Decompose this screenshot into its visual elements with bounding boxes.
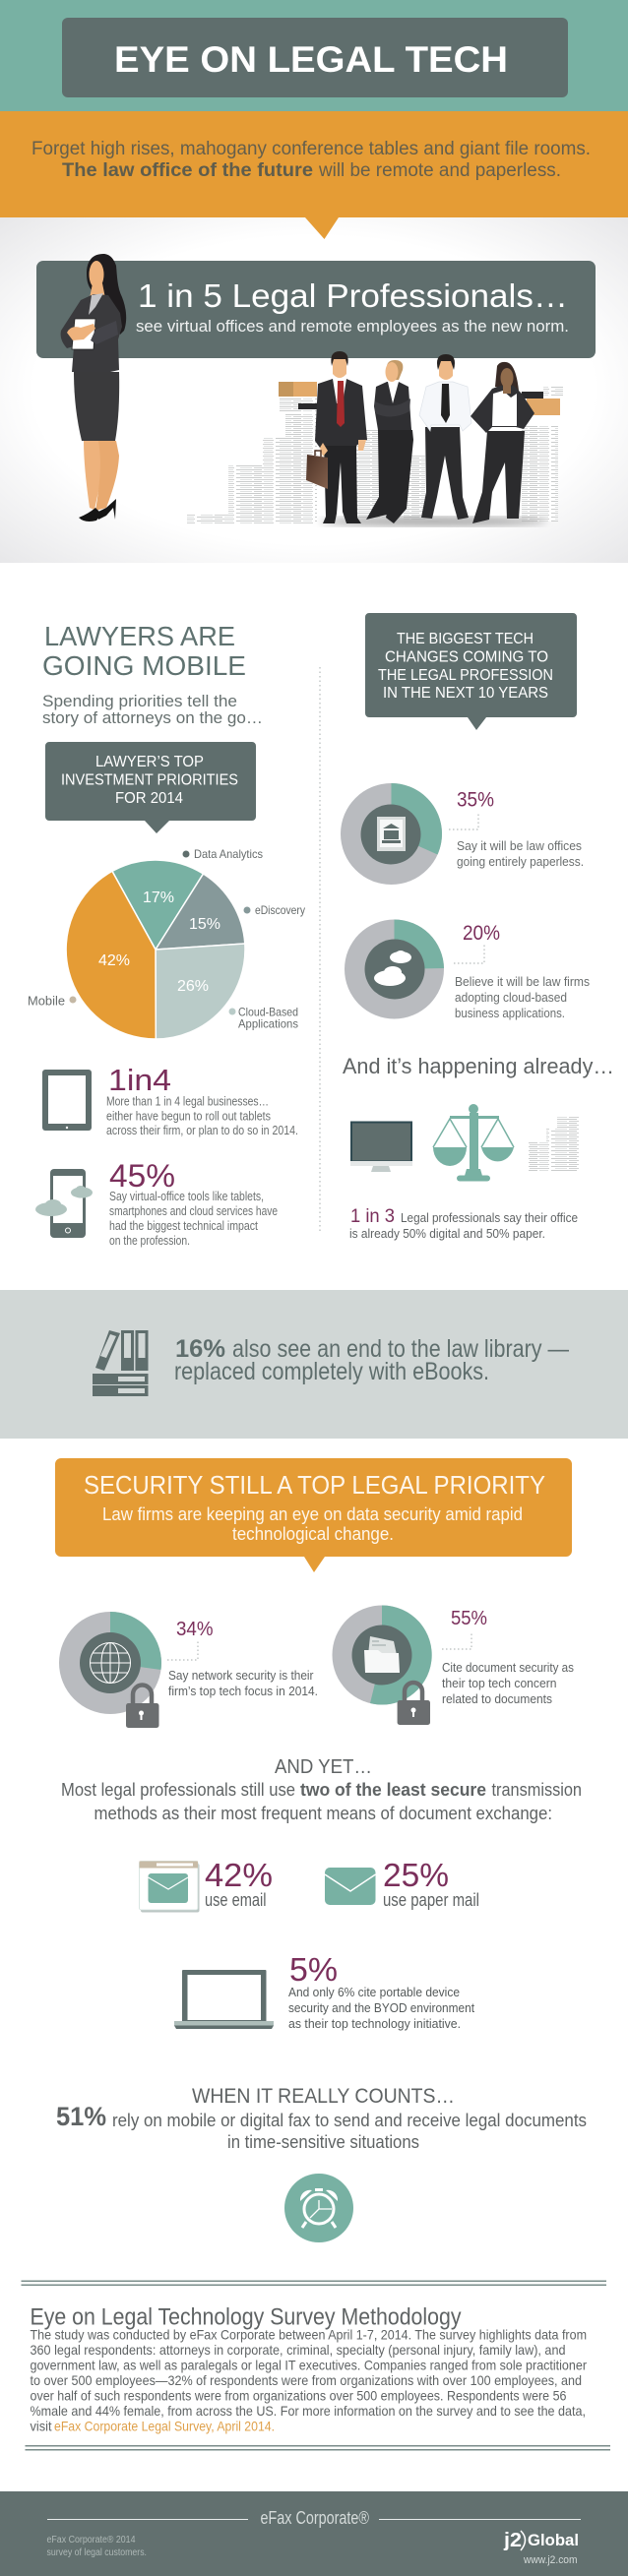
callout: security heading: Law firms are keeping an eye on data security amid rapid	[102, 1504, 523, 1524]
stat: 34 percent: Say network security is their	[168, 1668, 314, 1683]
donut chart: 35 percent paperless	[341, 783, 442, 885]
methodology text	[30, 2304, 587, 2434]
stat: 5 percent: 5%	[289, 1951, 338, 1988]
pie legend: Applications	[238, 1017, 298, 1031]
pie chart: investment priorities: 17%	[143, 889, 174, 906]
callout: biggest tech changes: THE BIGGEST TECH	[397, 631, 534, 647]
hero callout: 1 in 5 Legal Professionals…	[138, 277, 568, 314]
footer: www.j2.com	[523, 2554, 577, 2566]
icon: paper stack	[529, 1117, 579, 1171]
stat: 42 percent email	[205, 1857, 273, 1910]
icon: folder with documents	[364, 1636, 400, 1673]
illustration: standing businesswoman	[61, 254, 126, 521]
stat: 42 percent email: use email	[205, 1890, 266, 1910]
title: EYE ON LEGAL TECH	[114, 39, 508, 80]
icon: globe	[91, 1643, 130, 1683]
stat: 42 percent email: 42%	[205, 1857, 273, 1893]
text block: and yet: Most legal professionals still use	[61, 1780, 295, 1800]
pie chart: investment priorities	[66, 860, 245, 1039]
icon: alarm clock	[284, 2174, 353, 2242]
heading: and it's happening already: And it’s happening already…	[343, 1054, 614, 1078]
woman with hands on hips	[471, 362, 534, 523]
text block: when it really counts	[56, 2084, 587, 2152]
donut chart: 55 percent document security	[333, 1605, 432, 1725]
icon: padlock	[126, 1686, 159, 1728]
illustration: paper stacks and boxes	[187, 382, 563, 524]
stat: 5 percent: And only 6% cite portable device	[288, 1985, 460, 1999]
text block: and yet: AND YET…	[275, 1756, 372, 1778]
pie chart: investment priorities: 42%	[98, 952, 130, 969]
stat: 20 percent: adopting cloud-based	[455, 990, 567, 1005]
stat: 45 percent: on the profession.	[109, 1234, 190, 1248]
stat: 55 percent	[442, 1608, 574, 1706]
text block: and yet: transmission	[492, 1780, 582, 1800]
text block: when it really counts: 51%	[56, 2102, 106, 2131]
panel: law library band	[0, 1290, 628, 1439]
stat: 20 percent: business applications.	[455, 1006, 565, 1020]
stat: 25 percent paper mail: 25%	[383, 1857, 449, 1893]
intro banner: Forget high rises, mahogany conference tables and giant file rooms.	[31, 139, 591, 159]
text block: when it really counts: WHEN IT REALLY COUNTS…	[192, 2084, 455, 2108]
pie legend: Cloud-Based	[238, 1006, 298, 1019]
section: lawyers are going mobile heading: LAWYERS ARE	[44, 621, 235, 651]
methodology text: Eye on Legal Technology Survey Methodology	[30, 2304, 461, 2330]
text block: when it really counts: rely on mobile or digital fax to send and receive legal documents	[112, 2111, 587, 2130]
hero callout	[36, 261, 596, 358]
text block: when it really counts: in time-sensitive situations	[227, 2132, 419, 2152]
text block: and yet: two of the least secure	[300, 1780, 486, 1800]
icon: tablet with law building	[377, 817, 406, 851]
section: lawyers are going mobile heading	[42, 621, 246, 681]
footer: eFax Corporate®	[260, 2508, 369, 2528]
callout: security heading	[55, 1458, 572, 1572]
text block: and yet: methods as their most frequent means of document exchange:	[94, 1804, 552, 1823]
stat: 55 percent: 55%	[451, 1608, 487, 1629]
pie legend	[28, 847, 305, 1031]
section: lawyers are going mobile heading: GOING MOBILE	[42, 650, 246, 681]
donut chart: 34 percent network security	[59, 1612, 161, 1728]
panel: law library band: replaced completely with eBooks.	[174, 1358, 489, 1385]
callout: biggest tech changes: CHANGES COMING TO	[385, 649, 548, 665]
pie legend: eDiscovery	[255, 903, 305, 917]
pie chart: investment priorities: 26%	[177, 978, 209, 995]
stat: 55 percent: their top tech concern	[442, 1676, 557, 1690]
header band	[0, 0, 628, 112]
man in white shirt	[419, 354, 471, 520]
icon: scales of justice	[433, 1104, 514, 1181]
icon: books	[93, 1330, 148, 1396]
subheading: story of attorneys on the go…	[42, 708, 263, 727]
callout: top investment priorities: FOR 2014	[115, 790, 183, 807]
pie chart: investment priorities: 15%	[189, 916, 220, 933]
callout: biggest tech changes	[365, 613, 577, 730]
stat: 35 percent	[449, 789, 584, 869]
pie legend: Data Analytics	[194, 847, 263, 861]
title	[62, 18, 568, 97]
methodology text: to over 500 employees—32% of respondents were from organizations with over 100 employees, and	[30, 2372, 582, 2388]
callout: biggest tech changes: IN THE NEXT 10 YEARS	[383, 685, 548, 702]
stat: 55 percent: Cite document security as	[442, 1660, 574, 1675]
intro banner	[0, 111, 628, 217]
stat: 5 percent	[288, 1951, 474, 2031]
stat: 34 percent: firm’s top tech focus in 2014.	[168, 1684, 318, 1698]
callout: top investment priorities	[45, 742, 256, 833]
stat: 25 percent paper mail: use paper mail	[383, 1890, 479, 1910]
icon: tablet	[42, 1070, 92, 1131]
stat: 35 percent: 35%	[457, 789, 494, 811]
stat: 1 in 4: 1in4	[108, 1063, 171, 1097]
footer: survey of legal customers.	[47, 2547, 147, 2558]
hero callout: see virtual offices and remote employees as the new norm.	[136, 317, 569, 336]
stat: 1 in 3: is already 50% digital and 50% paper.	[349, 1226, 545, 1241]
donut chart: 20 percent cloud	[345, 919, 444, 1019]
stat: 1 in 4: either have begun to roll out tablets	[106, 1110, 271, 1124]
illustration: group of four legal professionals	[306, 351, 546, 526]
stat: 20 percent	[454, 922, 590, 1020]
callout: security heading: SECURITY STILL A TOP LEGAL PRIORITY	[84, 1470, 545, 1500]
stat: 1 in 4	[106, 1063, 298, 1137]
footer: eFax Corporate® 2014	[47, 2535, 136, 2545]
callout: security heading: technological change.	[232, 1524, 394, 1544]
stat: 25 percent paper mail	[383, 1857, 479, 1910]
icon: laptop	[174, 1970, 274, 2029]
stat: 35 percent: going entirely paperless.	[457, 854, 584, 869]
woman with crossed arms	[366, 360, 413, 523]
stat: 34 percent	[167, 1619, 318, 1698]
stat: 1 in 4: More than 1 in 4 legal businesses…	[106, 1094, 269, 1108]
panel: law library band: also see an end to the law library —	[232, 1335, 569, 1363]
stat: 34 percent: 34%	[176, 1619, 214, 1640]
icon: envelope	[325, 1868, 376, 1905]
logo: j2 Global: Global	[528, 2531, 579, 2549]
intro banner: The law office of the future	[62, 160, 313, 181]
methodology text: eFax Corporate Legal Survey, April 2014.	[54, 2419, 275, 2434]
methodology text: visit	[30, 2419, 52, 2434]
stat: 5 percent: security and the BYOD environment	[288, 2000, 474, 2015]
callout: biggest tech changes: THE LEGAL PROFESSION	[378, 667, 553, 684]
callout: top investment priorities: INVESTMENT PRIORITIES	[61, 771, 238, 789]
icon: desktop monitor	[350, 1122, 412, 1172]
callout: top investment priorities: LAWYER’S TOP	[95, 754, 204, 770]
subheading: Spending priorities tell the	[42, 692, 237, 710]
stat: 45 percent: Say virtual-office tools like tablets,	[109, 1190, 264, 1203]
subheading	[42, 692, 263, 727]
stat: 1 in 3: 1 in 3	[350, 1206, 395, 1227]
stat: 20 percent: Believe it will be law firms	[455, 974, 590, 989]
logo: j2 Global: j2	[503, 2530, 522, 2551]
icon: smartphone with clouds	[35, 1169, 93, 1238]
text block: and yet	[61, 1756, 582, 1823]
stat: 45 percent: 45%	[109, 1158, 175, 1194]
icon: padlock	[398, 1683, 430, 1725]
stat: 1 in 3	[349, 1206, 578, 1241]
stat: 55 percent: related to documents	[442, 1691, 552, 1706]
stat: 1 in 4: across their firm, or plan to do so in 2014.	[106, 1124, 298, 1137]
footer	[0, 2491, 628, 2576]
icon: email window	[140, 1862, 199, 1913]
intro banner: will be remote and paperless.	[318, 160, 561, 181]
stat: 5 percent: as their top technology initiative.	[288, 2016, 461, 2031]
panel: law library band: 16%	[175, 1335, 225, 1363]
stat: 20 percent: 20%	[463, 922, 500, 945]
stat: 45 percent: smartphones and cloud services have	[109, 1204, 278, 1218]
stat: 35 percent: Say it will be law offices	[457, 838, 582, 853]
icon: clouds	[374, 951, 411, 986]
stat: 45 percent: had the biggest technical impact	[109, 1219, 258, 1233]
logo: j2 Global	[503, 2530, 579, 2551]
methodology text: over half of such respondents were from organizations over 500 employees. Respondents were 56	[30, 2387, 567, 2403]
stat: 45 percent	[109, 1158, 278, 1248]
methodology text: 360 legal respondents: attorneys in corporate, criminal, specialty (personal injury, family law), and	[30, 2342, 565, 2358]
pie legend: Mobile	[28, 994, 65, 1008]
hero section background	[0, 217, 628, 563]
man with red tie	[306, 351, 367, 523]
stat: 1 in 3: Legal professionals say their office	[401, 1210, 578, 1225]
